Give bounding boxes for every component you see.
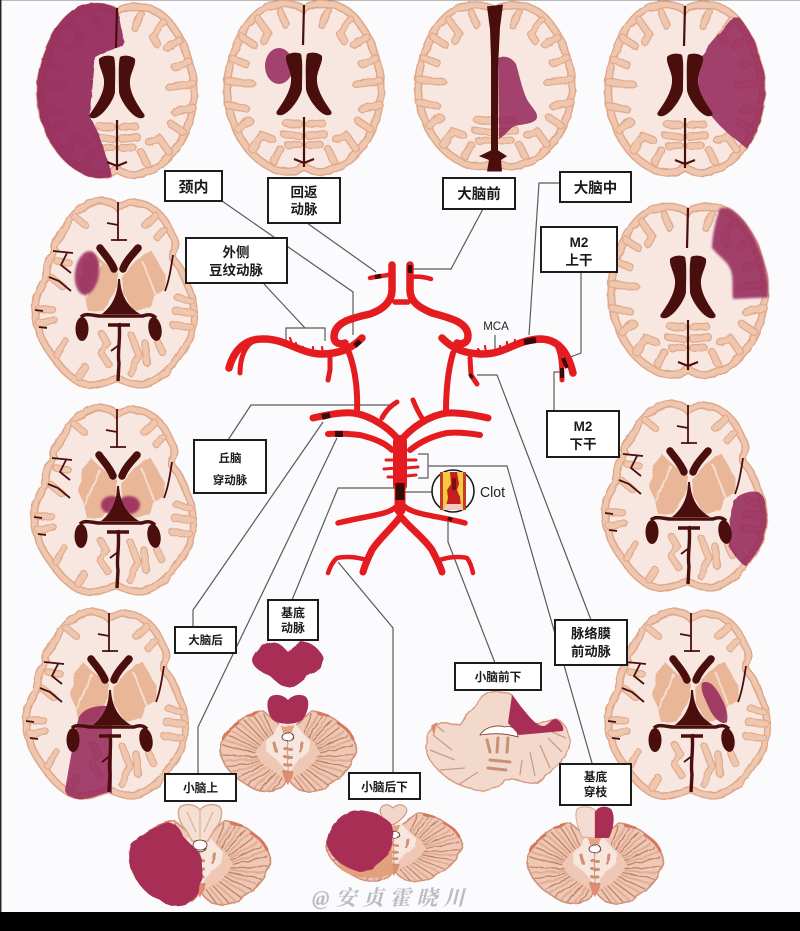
label: 丘脑穿动脉: [194, 440, 266, 493]
brain: M2 inferior division territory: [605, 404, 771, 588]
brain: internal carotid territory: [27, 2, 194, 182]
label: 基底动脉: 基底: [281, 605, 305, 620]
label: 外侧豆纹动脉: 外侧: [222, 244, 250, 260]
midbrain: basilar territory: [252, 642, 324, 687]
label: 小脑前下: [455, 663, 541, 690]
label: M2 下干: 下干: [570, 437, 596, 452]
label: 小脑上: [165, 774, 236, 801]
arterial circle and branches: [229, 265, 573, 573]
label: 基底穿枝: [560, 764, 631, 805]
brain: lenticulostriate territory: [35, 201, 195, 385]
cerebellum: basilar territory: [220, 695, 356, 792]
label: 大脑前: [443, 178, 515, 209]
cerebellum: superior cerebellar territory: [129, 805, 270, 906]
brain: recurrent artery territory: [227, 4, 381, 172]
label: 丘脑穿动脉: 穿动脉: [213, 473, 248, 487]
cerebellum: posterior inferior cerebellar territory: [326, 805, 462, 881]
label: 丘脑穿动脉: 丘脑: [218, 451, 242, 465]
brain: anterior choroidal territory: [608, 612, 768, 796]
bottom black bar: [0, 912, 800, 931]
label: 外侧豆纹动脉: [186, 238, 287, 283]
label: 小脑上: 小脑上: [183, 781, 218, 795]
label: M2 下干: [547, 411, 619, 457]
connector lines: [193, 183, 592, 774]
label: 回返动脉: [268, 178, 340, 223]
brain: thalamic perforator territory: [34, 408, 194, 592]
label: M2 上干: 上干: [566, 253, 592, 268]
label: 大脑后: [175, 627, 236, 653]
brain: middle cerebral territory: [604, 0, 766, 178]
label: 颈内: [165, 171, 222, 201]
brain: posterior cerebral territory: [26, 612, 186, 800]
cerebellum: anterior inferior cerebellar territory: [426, 692, 570, 791]
brain: M2 superior division territory: [611, 207, 800, 375]
label: 外侧豆纹动脉: 豆纹动脉: [209, 262, 263, 278]
label: 脉络膜前动脉: [555, 620, 627, 665]
label: M2 上干: [541, 227, 617, 272]
clot label: Clot: [480, 484, 506, 501]
label: 回返动脉: 回返: [290, 185, 318, 200]
label: 基底动脉: 动脉: [281, 621, 305, 635]
label: M2 下干: M2: [574, 419, 592, 434]
label: 基底穿枝: 基底: [584, 770, 607, 784]
occlusion markers on arteries: [322, 265, 567, 520]
label: 颈内: 颈内: [178, 179, 209, 196]
label: 大脑中: 大脑中: [574, 179, 617, 197]
label: 小脑前下: 小脑前下: [475, 670, 522, 684]
label: 脉络膜前动脉: 脉络膜: [571, 625, 611, 641]
label: M2 上干: M2: [570, 235, 588, 250]
clot inset: [432, 470, 474, 512]
label: 小脑后下: 小脑后下: [361, 780, 408, 794]
label: 小脑后下: [349, 773, 420, 799]
MCA label: MCA: [483, 321, 509, 333]
label: 大脑中: [560, 172, 631, 202]
label: 回返动脉: 动脉: [290, 202, 318, 217]
watermark: @安贞霍晓川: [312, 886, 470, 910]
label: 脉络膜前动脉: 前动脉: [571, 643, 612, 659]
label: 基底动脉: [268, 600, 318, 640]
label: 大脑后: 大脑后: [188, 633, 223, 647]
cerebellum: basilar perforator territory: [527, 807, 663, 904]
label: 基底穿枝: 穿枝: [584, 785, 607, 799]
brain: anterior cerebral territory: [418, 4, 572, 171]
label: 大脑前: 大脑前: [457, 185, 501, 203]
